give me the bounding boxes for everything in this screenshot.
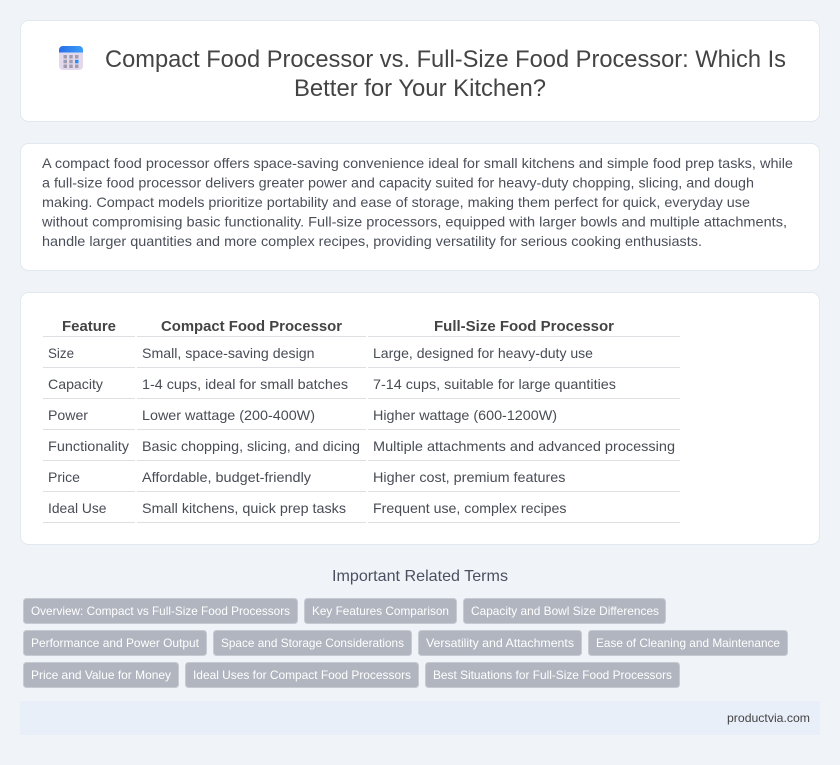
row: ideal use (48, 500, 566, 516)
row: functionality: Basic chopping, slicing, and dicing (142, 438, 360, 454)
row: power: Power (48, 407, 88, 423)
title: Compact Food Processor vs. Full-Size Food Processor: Which Is (105, 46, 786, 73)
tag group: related terms: Overview: Compact vs Full-Size Food Processors (31, 604, 290, 618)
row: size: Size (48, 345, 74, 361)
row: price: Affordable, budget-friendly (142, 469, 311, 485)
row: ideal use: Small kitchens, quick prep tasks (142, 500, 346, 516)
table header (62, 319, 614, 335)
panel: comparison table (20, 292, 820, 544)
row: size (48, 345, 593, 361)
tag group: related terms: Best Situations for Full-Size Food Processors (433, 668, 672, 682)
tag group: related terms (24, 598, 788, 688)
row: size: Large, designed for heavy-duty use (373, 345, 593, 361)
row: capacity (48, 376, 616, 392)
table header: Full-Size Food Processor (434, 319, 614, 335)
table header: Compact Food Processor (161, 319, 342, 335)
row: functionality: Multiple attachments and advanced processing (373, 438, 675, 454)
tag group: related terms: Ease of Cleaning and Maintenance (596, 636, 780, 650)
row: capacity: Capacity (48, 376, 103, 392)
row: size: Small, space-saving design (142, 345, 314, 361)
tag group: related terms: Capacity and Bowl Size Differences (471, 604, 659, 618)
text block: summary paragraph: a full-size food processor delivers greater power and capacity suited for heavy-duty chopping, slicing, and dough (42, 174, 754, 190)
tag group: related terms: Versatility and Attachments (426, 636, 574, 650)
row: price (48, 469, 566, 485)
row: power: Lower wattage (200-400W) (142, 407, 315, 423)
tag group: related terms: Key Features Comparison (312, 604, 449, 618)
heading: important related terms: Important Related Terms (332, 568, 508, 585)
row: capacity: 1-4 cups, ideal for small batches (142, 376, 348, 392)
footer: productvia.com (727, 711, 810, 725)
text block: summary paragraph: handle larger quantities and more complex recipes, providing versatility for serious cooking enthusiasts. (42, 233, 702, 249)
row: functionality (48, 438, 675, 454)
footer (20, 701, 820, 735)
tag group: related terms: Performance and Power Output (31, 636, 200, 650)
row: price: Price (48, 469, 80, 485)
tag group: related terms: Space and Storage Considerations (221, 636, 404, 650)
text block: summary paragraph: A compact food processor offers space-saving convenience ideal for small kitchens and simple food prep tasks, while (42, 155, 793, 171)
title: Better for Your Kitchen? (294, 75, 546, 102)
text block: summary paragraph (41, 155, 793, 249)
text block: summary paragraph: without compromising basic functionality. Full-size processors, equipped with larger bowls and multiple attachments, (41, 214, 787, 230)
row: power (48, 407, 557, 423)
row: capacity: 7-14 cups, suitable for large quantities (373, 376, 616, 392)
row: ideal use: Frequent use, complex recipes (373, 500, 566, 516)
row: ideal use: Ideal Use (48, 500, 107, 516)
panel: title header (20, 20, 820, 122)
row: functionality: Functionality (48, 438, 129, 454)
panel: summary (20, 144, 820, 270)
text block: summary paragraph: making. Compact models prioritize portability and ease of storage, making them perfect for quick, everyday use (42, 194, 750, 210)
tag group: related terms: Ideal Uses for Compact Food Processors (193, 668, 411, 682)
table header: Feature (62, 319, 116, 335)
title (105, 46, 786, 102)
row: price: Higher cost, premium features (373, 469, 566, 485)
icon: calendar (59, 46, 83, 70)
tag group: related terms: Price and Value for Money (31, 668, 171, 682)
row: power: Higher wattage (600-1200W) (373, 407, 557, 423)
